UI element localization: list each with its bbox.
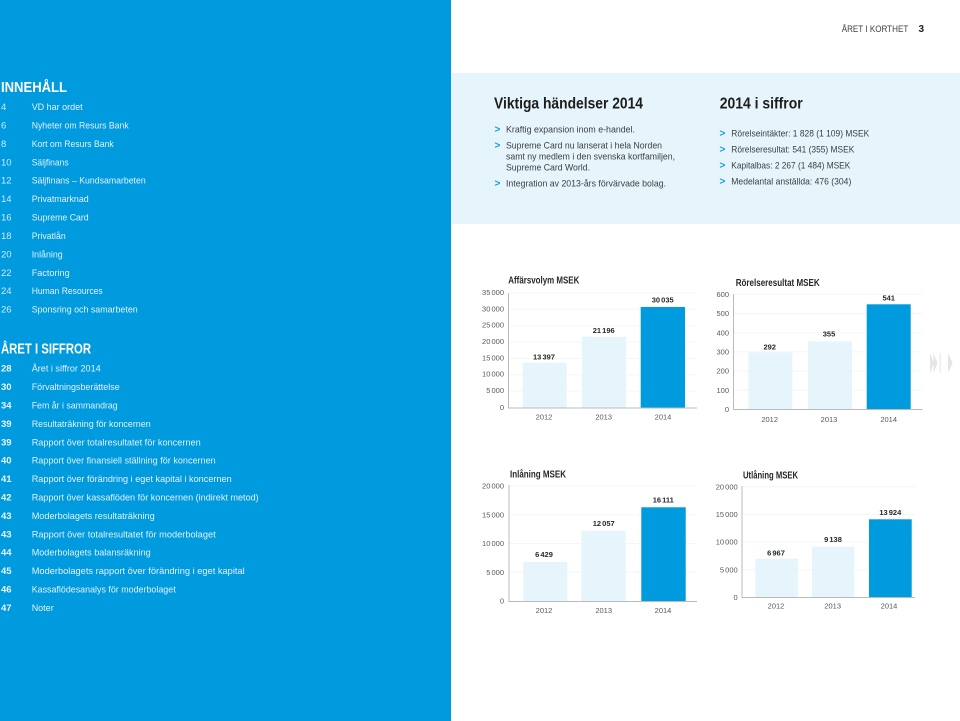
list: key figures: Rörelseresultat: 541 (355) MSEK: [731, 145, 855, 156]
list: events: Supreme Card World.: [506, 163, 590, 174]
bar chart: Inlåning MSEK: 2013: [595, 606, 612, 615]
list: Innehåll entries: 20: [1, 249, 12, 260]
bar chart: Inlåning MSEK: 2014: [655, 606, 671, 615]
bar chart: Utlåning MSEK: Utlåning MSEK: [743, 470, 799, 482]
bar chart: Rörelseresultat MSEK: 100: [716, 386, 729, 395]
bar chart: Affärsvolym MSEK: 30 000: [482, 304, 504, 313]
bar chart: Rörelseresultat MSEK: 2014: [880, 415, 897, 424]
list: Året i siffror entries: 28: [1, 364, 12, 375]
bar chart: Rörelseresultat MSEK: 2013: [821, 415, 837, 424]
bar chart: Rörelseresultat MSEK: 500: [716, 309, 729, 318]
list: Året i siffror entries: 30: [1, 382, 12, 393]
bar chart: Utlåning MSEK: 15 000: [716, 510, 738, 519]
list: events: [494, 124, 675, 190]
list: Året i siffror entries: Moderbolagets balansräkning: [32, 548, 151, 559]
list: Innehåll entries: Nyheter om Resurs Bank: [32, 120, 129, 132]
bar chart: Inlåning MSEK: 12 057: [593, 519, 615, 528]
bar chart: Affärsvolym MSEK: 35 000: [482, 288, 504, 297]
bar chart: Inlåning MSEK: 20 000: [482, 482, 504, 491]
list: Innehåll entries: 16: [1, 213, 12, 224]
list: Innehåll entries: 18: [1, 231, 12, 242]
list: Innehåll entries: Inlåning: [32, 249, 63, 260]
panel: table of contents: [0, 0, 451, 721]
bar chart: Affärsvolym MSEK: 2014: [655, 413, 671, 422]
bar chart: Rörelseresultat MSEK: 292: [763, 342, 776, 351]
list: Året i siffror entries: Året i siffror 2014: [32, 364, 101, 375]
list: key figures: Medelantal anställda: 476 (304): [731, 177, 851, 188]
list: key figures: [720, 129, 870, 188]
list: events: >: [494, 124, 500, 135]
bar chart: Affärsvolym MSEK: 5 000: [486, 386, 504, 395]
list: Året i siffror entries: 45: [1, 566, 12, 577]
list: Året i siffror entries: 34: [1, 400, 12, 412]
bar chart: Affärsvolym MSEK: 13 397: [533, 352, 555, 361]
bar chart: Utlåning MSEK: 9 138: [824, 535, 842, 544]
list: key figures: >: [720, 129, 726, 140]
list: key figures: >: [720, 161, 726, 172]
bar chart: Rörelseresultat MSEK: 541: [882, 294, 895, 303]
bar chart: Affärsvolym MSEK: [482, 275, 697, 422]
list: Året i siffror entries: [1, 364, 259, 614]
bar chart: Utlåning MSEK: 0: [734, 593, 738, 602]
list: key figures: Kapitalbas: 2 267 (1 484) MSEK: [731, 161, 851, 172]
bar chart: Utlåning MSEK: 13 924: [879, 508, 902, 517]
list: Året i siffror entries: 43: [1, 529, 12, 540]
list: key figures: >: [720, 177, 726, 188]
list: Innehåll entries: [1, 102, 146, 316]
bar chart: Utlåning MSEK: 5 000: [720, 565, 738, 574]
bar chart: Utlåning MSEK: 20 000: [716, 482, 738, 491]
list: Innehåll entries: Privatlån: [32, 231, 66, 242]
list: Året i siffror entries: 47: [1, 603, 12, 614]
list: Innehåll entries: VD har ordet: [32, 102, 83, 113]
list: Innehåll entries: 4: [1, 102, 6, 113]
bar chart: Rörelseresultat MSEK: 355: [823, 329, 835, 338]
bar chart: Affärsvolym MSEK: 20 000: [482, 337, 504, 346]
list: Året i siffror entries: Kassaflödesanalys för moderbolaget: [32, 584, 176, 596]
bar chart: Affärsvolym MSEK: 2013: [595, 413, 612, 422]
bar chart: Inlåning MSEK: 0: [500, 597, 504, 606]
list: Innehåll entries: 22: [1, 268, 12, 279]
list: Året i siffror entries: 40: [1, 456, 12, 467]
list: Året i siffror entries: Noter: [32, 603, 54, 614]
list: events: Supreme Card nu lanserat i hela Norden: [506, 140, 662, 151]
heading: Innehåll: INNEHÅLL: [1, 79, 67, 96]
list: Innehåll entries: Kort om Resurs Bank: [32, 139, 114, 150]
heading: 2014 i siffror: 2014 i siffror: [720, 95, 803, 112]
bar chart: Rörelseresultat MSEK: 0: [725, 405, 729, 414]
list: Året i siffror entries: Rapport över totalresultatet för moderbolaget: [32, 529, 216, 540]
bar chart: Rörelseresultat MSEK: 2012: [761, 415, 778, 424]
list: Året i siffror entries: Moderbolagets resultaträkning: [32, 511, 155, 522]
list: Innehåll entries: 6: [1, 120, 6, 132]
panel: highlights: [451, 73, 960, 224]
list: Innehåll entries: Human Resources: [32, 286, 103, 297]
bar chart: Utlåning MSEK: 2014: [881, 602, 897, 611]
bar chart: Affärsvolym MSEK: 0: [500, 403, 504, 412]
bar chart: Utlåning MSEK: [716, 470, 915, 611]
bar chart: Utlåning MSEK: 2013: [824, 602, 841, 611]
list: Året i siffror entries: 43: [1, 511, 12, 522]
bar chart: Affärsvolym MSEK: 2012: [536, 413, 552, 422]
list: Innehåll entries: Säljfinans – Kundsamarbeten: [32, 176, 146, 187]
list: Innehåll entries: Supreme Card: [32, 213, 89, 224]
list: Året i siffror entries: Resultaträkning för koncernen: [32, 419, 151, 430]
page header: ÅRET I KORTHET: [842, 24, 908, 35]
bar chart: Affärsvolym MSEK: 25 000: [482, 321, 504, 330]
bar chart: Inlåning MSEK: 5 000: [486, 568, 504, 577]
list: events: Kraftig expansion inom e-handel.: [506, 124, 635, 135]
list: Innehåll entries: Factoring: [32, 268, 70, 279]
bar chart: Inlåning MSEK: 16 111: [653, 496, 674, 505]
bar chart: Affärsvolym MSEK: 10 000: [482, 370, 504, 379]
list: Innehåll entries: Säljfinans: [32, 157, 69, 168]
bar chart: Inlåning MSEK: 15 000: [482, 510, 504, 520]
heading: Året i siffror: ÅRET I SIFFROR: [1, 340, 91, 357]
bar chart: Affärsvolym MSEK: 21 196: [593, 326, 615, 335]
list: Året i siffror entries: Fem år i sammandrag: [32, 400, 118, 412]
bar chart: Utlåning MSEK: 10 000: [716, 538, 738, 547]
list: Innehåll entries: 10: [1, 157, 12, 168]
list: Året i siffror entries: 46: [1, 584, 12, 596]
bar chart: Rörelseresultat MSEK: 400: [716, 328, 729, 337]
page header: 3: [918, 24, 924, 35]
bar chart: Rörelseresultat MSEK: [716, 278, 923, 424]
list: events: >: [494, 140, 500, 151]
list: key figures: Rörelseintäkter: 1 828 (1 109) MSEK: [731, 129, 870, 140]
list: events: Integration av 2013-års förvärvade bolag.: [506, 179, 666, 190]
bar chart: Affärsvolym MSEK: Affärsvolym MSEK: [508, 275, 580, 286]
list: Innehåll entries: Sponsring och samarbeten: [32, 305, 138, 316]
list: Innehåll entries: 8: [1, 139, 6, 150]
list: Året i siffror entries: 39: [1, 437, 12, 448]
list: Innehåll entries: Privatmarknad: [32, 194, 89, 205]
bar chart: Inlåning MSEK: 6 429: [535, 550, 553, 559]
list: Innehåll entries: 24: [1, 286, 12, 297]
bar chart: Inlåning MSEK: 2012: [536, 606, 552, 615]
bar chart: Affärsvolym MSEK: 30 035: [652, 296, 674, 305]
list: Innehåll entries: 26: [1, 305, 12, 316]
list: Året i siffror entries: Moderbolagets rapport över förändring i eget kapital: [32, 566, 245, 577]
bar chart: Inlåning MSEK: Inlåning MSEK: [510, 468, 567, 480]
list: Innehåll entries: 14: [1, 194, 12, 205]
bar chart: Utlåning MSEK: 2012: [768, 602, 784, 611]
icon: next page arrows: [930, 353, 953, 373]
heading: Viktiga händelser 2014: Viktiga händelser 2014: [494, 95, 643, 112]
list: Året i siffror entries: 39: [1, 419, 12, 430]
list: Året i siffror entries: Rapport över kassaflöden för koncernen (indirekt metod): [32, 492, 259, 504]
list: Året i siffror entries: Förvaltningsberättelse: [32, 382, 120, 393]
bar chart: Rörelseresultat MSEK: Rörelseresultat MSEK: [736, 278, 820, 289]
list: events: >: [494, 179, 500, 190]
list: Året i siffror entries: Rapport över förändring i eget kapital i koncernen: [32, 474, 232, 485]
bar chart: Inlåning MSEK: 10 000: [482, 539, 504, 548]
list: events: samt ny medlem i den svenska kortfamiljen,: [506, 152, 675, 162]
bar chart: Affärsvolym MSEK: 15 000: [482, 353, 504, 362]
bar chart: Rörelseresultat MSEK: 300: [716, 348, 729, 356]
list: Året i siffror entries: 44: [1, 548, 12, 559]
bar chart: Rörelseresultat MSEK: 600: [716, 290, 729, 299]
bar chart: Inlåning MSEK: [482, 468, 697, 615]
list: Innehåll entries: 12: [1, 176, 12, 187]
list: Året i siffror entries: 41: [1, 474, 12, 485]
list: Året i siffror entries: Rapport över finansiell ställning för koncernen: [32, 456, 216, 467]
list: Året i siffror entries: 42: [1, 492, 12, 504]
list: key figures: >: [720, 145, 726, 156]
list: Året i siffror entries: Rapport över totalresultatet för koncernen: [32, 437, 201, 448]
bar chart: Utlåning MSEK: 6 967: [767, 548, 785, 557]
bar chart: Rörelseresultat MSEK: 200: [716, 367, 729, 376]
